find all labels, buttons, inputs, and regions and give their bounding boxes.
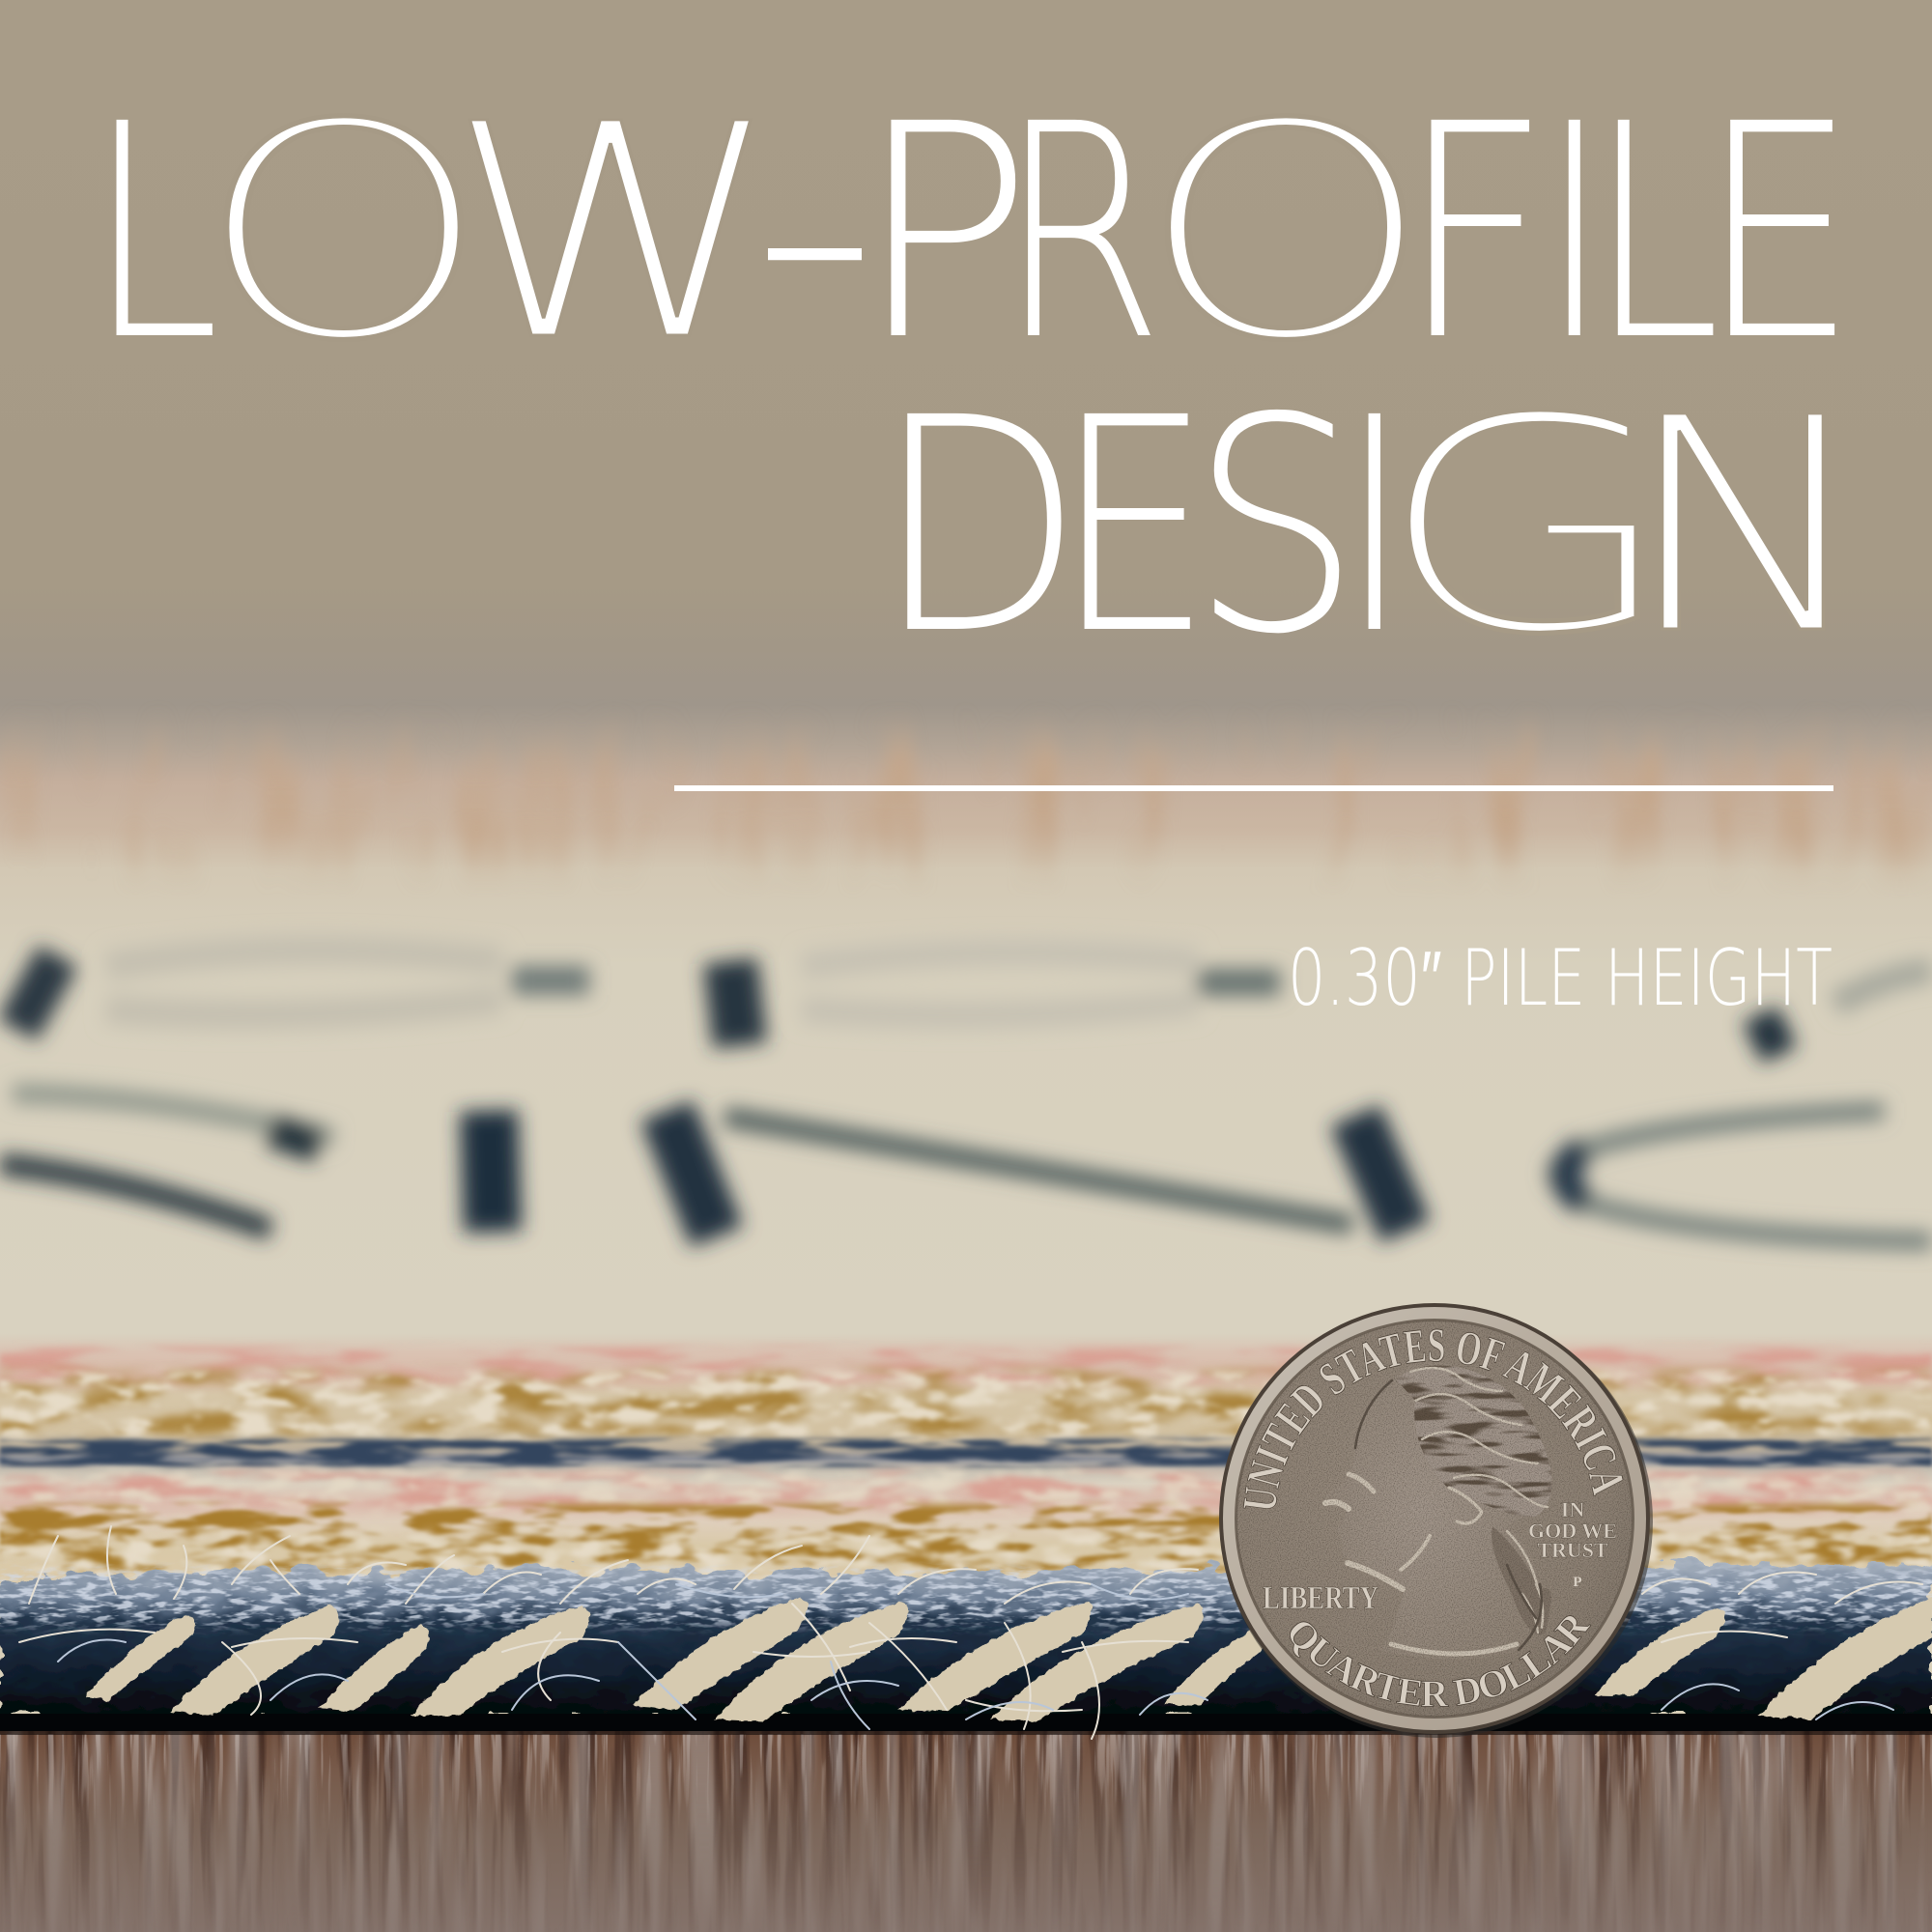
woven border bands bbox=[0, 1349, 1932, 1579]
stray fibres bbox=[19, 1526, 1922, 1739]
title: L bbox=[87, 62, 220, 406]
title: S bbox=[1190, 355, 1361, 699]
title bbox=[87, 62, 1875, 699]
hair bbox=[1397, 1366, 1551, 1517]
legend: in god we trust: GOD WE bbox=[1528, 1519, 1617, 1543]
title: - bbox=[751, 62, 879, 406]
legend: in god we trust: IN bbox=[1561, 1497, 1584, 1521]
title: P bbox=[855, 62, 1034, 406]
title: E bbox=[1054, 355, 1212, 699]
title: E bbox=[1700, 62, 1857, 406]
title: O bbox=[1137, 62, 1435, 406]
title: D bbox=[874, 355, 1084, 699]
legend: quarter dollar: QUARTER DOLLAR bbox=[1290, 1615, 1592, 1707]
title: I bbox=[1340, 355, 1409, 699]
coin lettering bbox=[1242, 1329, 1623, 1707]
braided rope edge of rug bbox=[0, 1526, 1932, 1739]
wood floor bbox=[0, 1725, 1932, 1932]
coin: United States quarter bbox=[1219, 1303, 1653, 1738]
divider line bbox=[674, 785, 1833, 791]
legend: liberty: LIBERTY bbox=[1263, 1580, 1378, 1616]
legend: in god we trust bbox=[1528, 1497, 1617, 1562]
title: R bbox=[999, 62, 1163, 406]
title: I bbox=[1541, 62, 1608, 406]
blurred rug lettering bbox=[0, 951, 1932, 1241]
title: N bbox=[1621, 355, 1875, 699]
legend: united states of america: UNITED STATES OF AMERICA bbox=[1242, 1329, 1623, 1509]
blurred peach border band bbox=[0, 744, 1932, 855]
title: L bbox=[1589, 62, 1720, 406]
title: O bbox=[195, 62, 491, 406]
legend: in god we trust: TRUST bbox=[1537, 1538, 1608, 1562]
title: G bbox=[1375, 355, 1679, 699]
title: W bbox=[446, 62, 782, 406]
coin portrait bbox=[1236, 1321, 1633, 1717]
title: F bbox=[1399, 62, 1551, 406]
cream twisted strands bbox=[85, 1598, 1932, 1721]
mint mark: P bbox=[1573, 1575, 1582, 1590]
